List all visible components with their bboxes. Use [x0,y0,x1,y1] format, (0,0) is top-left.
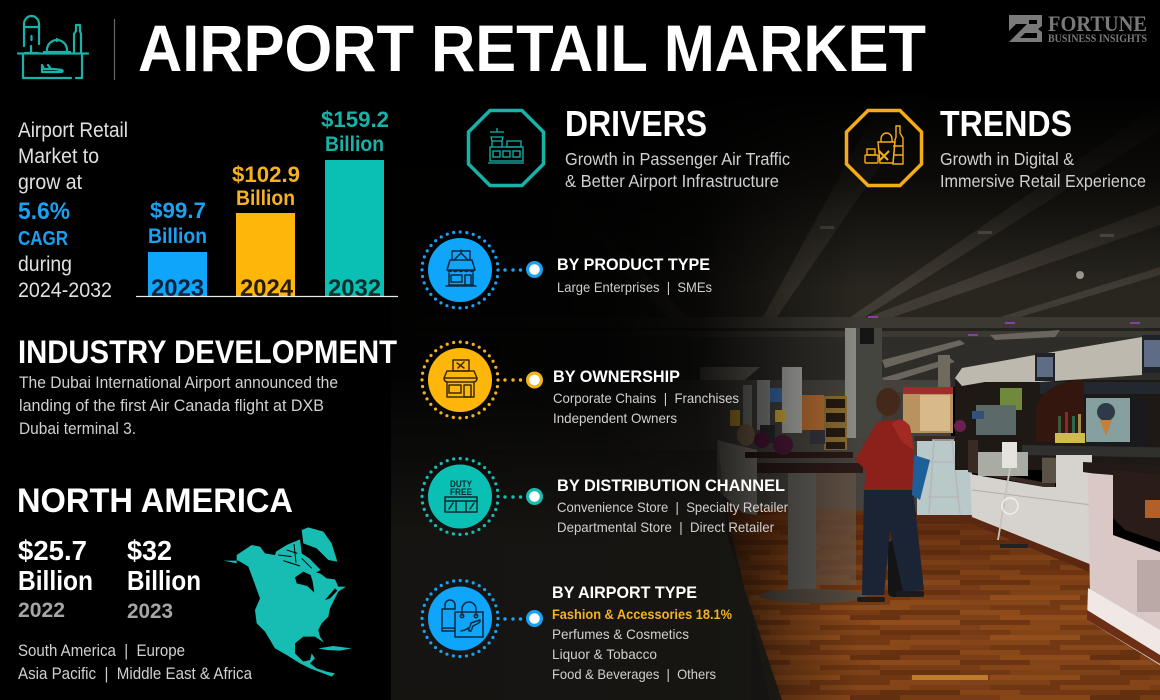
icon: duty free on teal disc [422,458,498,534]
segment: by airport type [422,580,732,682]
text block: CAGR summary: during [18,253,72,276]
bar 2032: Billion [325,133,384,156]
text block: trends [940,149,1146,191]
label: BY DISTRIBUTION CHANNEL [557,476,785,495]
stat: 2023 value: $32 [127,535,172,566]
ceiling [391,90,1160,330]
text block: CAGR summary: 5.6% [18,198,70,225]
heading: north america: NORTH AMERICA [17,482,293,520]
floor [391,450,751,700]
heading: industry development: INDUSTRY DEVELOPMENT [18,334,397,370]
stat: 2022 value [18,535,93,622]
stat: 2023 value [127,535,201,623]
map: north america [223,527,352,677]
back display zone [955,380,1160,470]
heading: trends: TRENDS [940,103,1072,144]
seated people [737,424,755,446]
bar 2024: $102.9 [232,162,300,187]
text block: industry development: The Dubai International Airport announced the [19,374,338,392]
text block: drivers: & Better Airport Infrastructure [565,171,779,191]
icon: duty free on teal disc: DUTY [450,479,472,489]
bar 2032: $159.2 [321,107,389,132]
text block: other regions: South America | Europe [18,642,185,660]
items: Corporate Chains | Franchises [553,390,739,406]
person at table [855,388,930,602]
text block: trends: Growth in Digital & [940,149,1074,169]
text block: CAGR summary: Market to [18,145,99,168]
text block: other regions [18,642,253,683]
connector [503,372,543,388]
bar chart: market size [136,107,398,302]
text block: drivers: Growth in Passenger Air Traffic [565,149,790,169]
text block: industry development: Dubai terminal 3. [19,420,136,438]
bar 2032: 2032 [328,275,381,302]
tall tables [745,420,966,603]
coffee machine [1085,396,1147,450]
right end counter [1083,462,1160,665]
bar 2023: $99.7 [150,198,206,223]
icon: duty free on teal disc: FREE [450,487,472,497]
logo: Fortune Business Insights [1009,11,1147,45]
items: Convenience Store | Specialty Retailer [557,499,788,515]
items: Departmental Store | Direct Retailer [557,519,774,535]
items: Large Enterprises | SMEs [557,279,712,295]
plants and goods [1000,388,1022,410]
items: Independent Owners [553,410,677,426]
text block: CAGR summary: Airport Retail [18,119,128,142]
items: Perfumes & Cosmetics [552,626,689,642]
items [552,606,732,682]
mid background [391,380,951,540]
photo: airport retail concourse [391,90,1160,700]
connector [503,488,543,505]
label: BY AIRPORT TYPE [552,583,697,602]
stool counter [917,437,972,519]
text block: CAGR summary: grow at [18,171,82,194]
icon: shopping bags on blue disc [422,580,498,656]
header divider [114,19,116,80]
segment: by product type [422,232,712,308]
text block: industry development: landing of the first Air Canada flight at DXB [19,397,324,415]
distant shops [802,395,824,430]
upper white bulkhead [955,337,1142,386]
icon: store on blue disc [422,232,498,308]
text block: industry development [19,374,338,438]
icon: airport shop counter [18,16,88,78]
stat: 2022 value: $25.7 [18,535,87,566]
logo: Fortune Business Insights: FORTUNE [1048,11,1147,36]
arch niche [1036,380,1084,442]
drivers icon: octagon [468,110,544,186]
far ceiling [391,337,1160,387]
stat: 2023 value: 2023 [127,600,173,623]
bar 2023 [148,198,207,302]
main white wall [970,455,1092,570]
columns [782,367,802,433]
connector [503,261,543,278]
horizontal ceiling band [391,317,1160,337]
trends icon: octagon [846,110,922,186]
segment: by ownership [422,342,739,426]
label: BY OWNERSHIP [553,367,680,386]
bar 2024: Billion [236,187,295,210]
text block: trends: Immersive Retail Experience [940,171,1146,191]
bar 2023: Billion [148,225,207,248]
stat: 2023 value: Billion [127,565,201,596]
items: Fashion & Accessories 18.1% [552,606,732,622]
icon: shop on amber disc [422,342,498,418]
bar 2024 [232,162,300,302]
logo: Fortune Business Insights: BUSINESS INSIGHTS [1048,33,1147,45]
items [557,499,788,535]
glass niche frame [968,440,1055,487]
heading: drivers: DRIVERS [565,103,707,144]
bar 2024: 2024 [240,275,294,302]
bottles [1058,412,1081,434]
items [553,390,739,426]
text block: CAGR summary: 2024-2032 [18,279,112,302]
stat: 2022 value: 2022 [18,599,65,622]
left white counter [717,440,757,515]
stat: 2022 value: Billion [18,565,93,596]
segment: by distribution channel [422,458,788,535]
text block: drivers [565,149,790,191]
items: Liquor & Tobacco [552,646,657,662]
text block: CAGR summary [18,119,128,302]
title: AIRPORT RETAIL MARKET [138,11,926,85]
bar 2032 [321,107,389,302]
wine shelf [824,396,847,450]
text block: CAGR summary: CAGR [18,228,68,250]
text block: other regions: Asia Pacific | Middle East & Africa [18,665,253,683]
bar 2023: 2023 [151,275,204,302]
signage stand [998,442,1028,548]
connector [503,610,543,627]
items: Food & Beverages | Others [552,666,716,682]
label: BY PRODUCT TYPE [557,255,710,274]
